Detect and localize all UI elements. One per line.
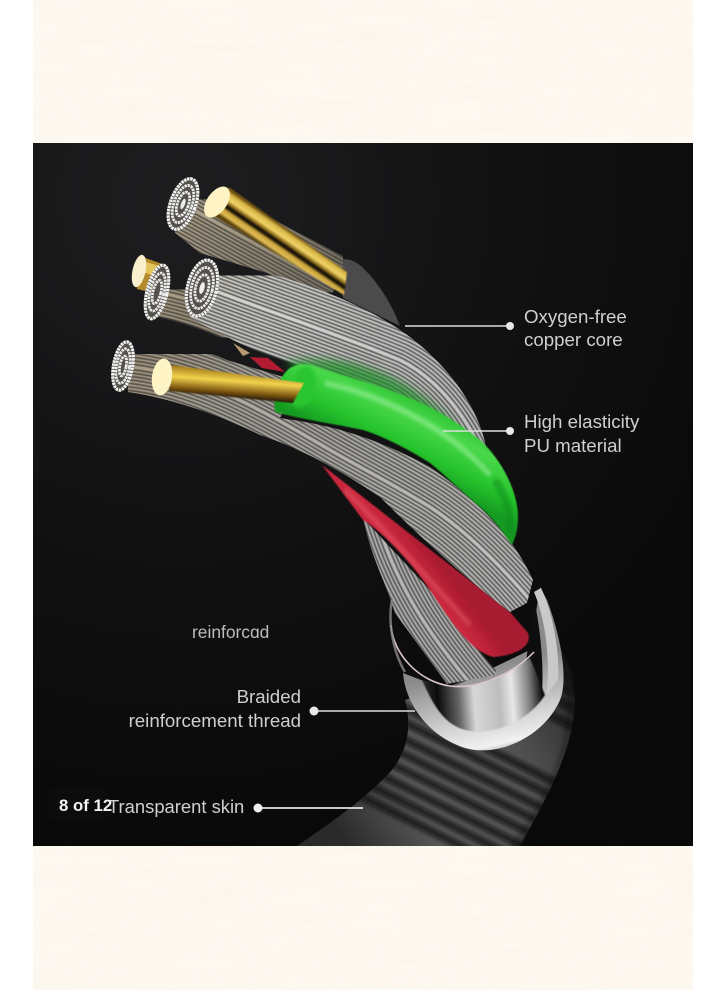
red PU core (322, 465, 529, 657)
wire end face: middle small (139, 261, 175, 323)
top copper strand (183, 204, 335, 288)
small gold tip behind (129, 254, 166, 292)
callout: transparent skin (108, 796, 363, 817)
callout: high elasticity PU material (443, 411, 640, 456)
panel: dark product photo (33, 143, 693, 846)
lower wire strand (364, 520, 496, 684)
green PU core (274, 364, 518, 545)
top gold conductor (199, 182, 347, 295)
callout: braided reinforcement thread (129, 686, 415, 731)
image counter (47, 788, 112, 822)
callout: braided reinforcement thread: Braided (237, 686, 301, 707)
grey inner sleeve behind top strand (338, 259, 400, 326)
front gold conductor (150, 357, 304, 403)
cable illustration (111, 177, 575, 846)
wire end face: middle large (179, 255, 225, 321)
callout: high elasticity PU material: PU material (524, 435, 622, 456)
transparent ring front edge (391, 600, 534, 687)
big silver strand (200, 285, 490, 470)
wire end face: top (160, 173, 206, 235)
right ring wall (534, 588, 558, 696)
silver inner tube (422, 658, 545, 732)
green reflection on silver strand (285, 359, 455, 425)
text: reinforced fragment: reinforcɑd (192, 622, 269, 642)
callout: oxygen-free copper core: copper core (524, 329, 623, 350)
callout: high elasticity PU material: High elasticity (524, 411, 640, 432)
silver base rim (403, 587, 564, 750)
callout: oxygen-free copper core: Oxygen-free (524, 306, 627, 327)
image counter: 8 of 12 (59, 796, 112, 815)
long silver strand (123, 366, 530, 600)
small copper strand (158, 290, 228, 338)
ring inner shadow (395, 590, 545, 686)
wire end face: lower (108, 338, 138, 394)
black outer cable with ribbed skin (297, 650, 575, 846)
red core tip (233, 343, 285, 372)
callout: oxygen-free copper core (405, 306, 627, 350)
callout: transparent skin: Transparent skin (108, 796, 244, 817)
callout: braided reinforcement thread: reinforcement thread (129, 710, 301, 731)
